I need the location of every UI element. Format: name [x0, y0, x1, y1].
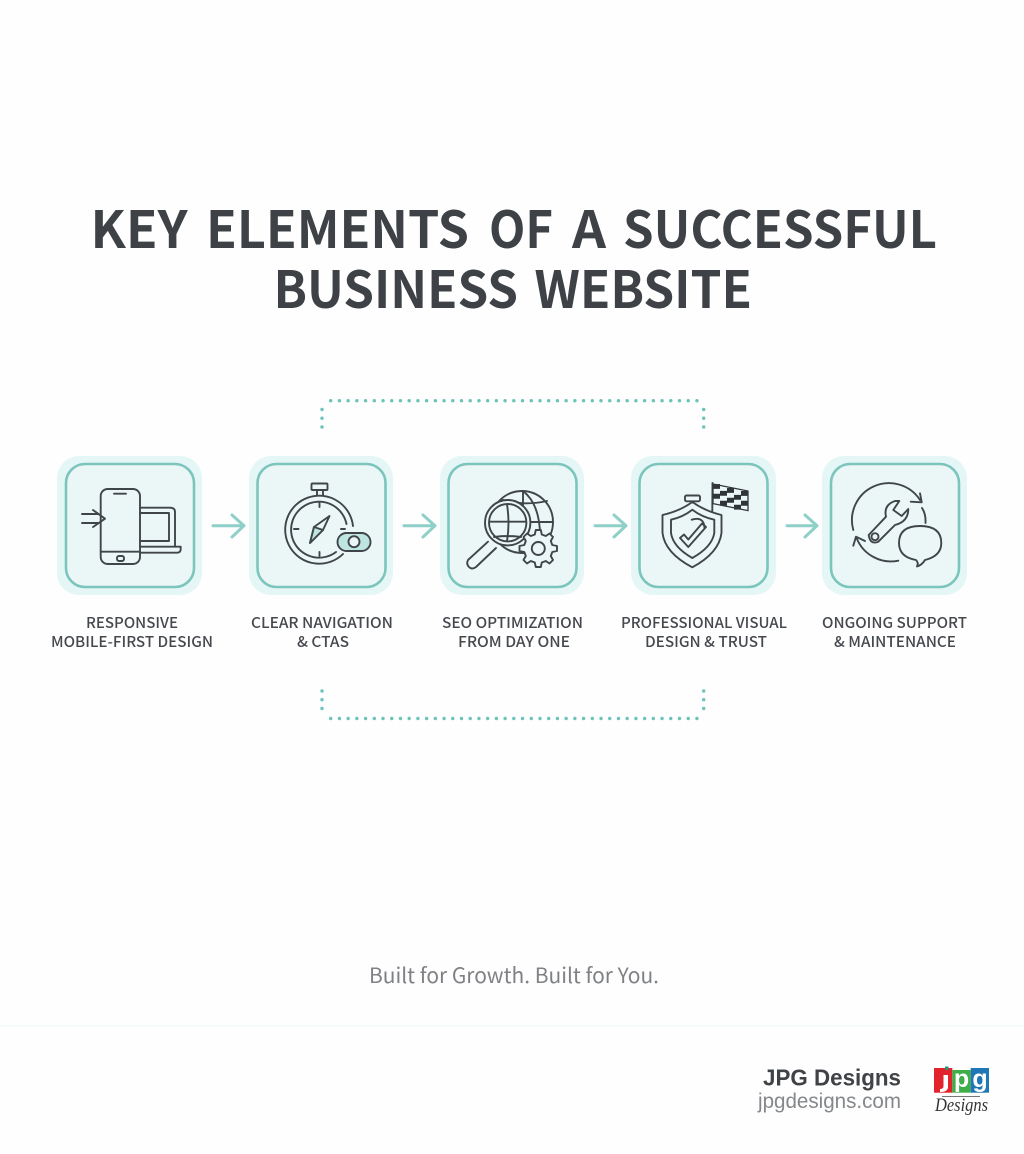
card 4	[631, 456, 776, 595]
footer brand text	[757, 1064, 901, 1113]
title: SUCCESSFUL	[623, 189, 937, 263]
footer brand text: JPG Designs	[763, 1064, 901, 1090]
card 2	[249, 456, 393, 595]
title: KEY	[90, 189, 188, 263]
footer brand text: jpgdesigns.com	[757, 1090, 901, 1113]
tagline: Built for Growth. Built for You.	[369, 960, 659, 990]
icon: shield with check and flag pole	[662, 483, 722, 567]
icon: magnifier, globe and gear	[467, 491, 557, 568]
title: WEBSITE	[534, 249, 752, 323]
panel: ongoing support and maintenance	[822, 456, 967, 652]
bottom dotted bracket	[322, 691, 704, 718]
label 1: MOBILE-FIRST DESIGN	[51, 631, 213, 652]
label 3: FROM DAY ONE	[458, 631, 570, 652]
label 4: PROFESSIONAL VISUAL	[621, 612, 787, 633]
label 1	[51, 612, 213, 652]
footer divider	[0, 1025, 1024, 1026]
panel: professional visual design and trust	[621, 456, 787, 652]
label 1: RESPONSIVE	[86, 612, 178, 633]
panel: clear navigation and CTAs	[249, 456, 393, 652]
icon: wrench, cycle arrows and speech bubble	[852, 483, 941, 566]
logo: JPG Designs: p	[954, 1065, 969, 1093]
icon: stopwatch compass with toggle	[285, 484, 370, 564]
panel: SEO optimization from day one	[440, 456, 584, 652]
label 5: & MAINTENANCE	[834, 631, 956, 652]
title: BUSINESS	[274, 249, 518, 323]
title: OF	[489, 189, 553, 263]
title	[90, 189, 937, 323]
arrow 1	[213, 515, 244, 537]
label 2	[251, 612, 393, 652]
arrow 3	[595, 515, 626, 537]
logo: JPG Designs	[934, 1065, 989, 1116]
title: ELEMENTS	[206, 189, 469, 263]
card 3	[440, 456, 584, 595]
label 3	[442, 612, 583, 652]
icon: phone and laptop	[82, 489, 181, 564]
title: A	[571, 189, 606, 263]
card 5	[822, 456, 967, 595]
label 5	[822, 612, 967, 652]
arrow 2	[404, 515, 435, 537]
top dotted bracket	[322, 401, 704, 428]
arrow 4	[787, 515, 817, 537]
card 1	[57, 456, 202, 595]
panel: responsive mobile-first design	[51, 456, 213, 652]
logo: JPG Designs: Designs	[934, 1095, 988, 1116]
logo: JPG Designs: g	[972, 1065, 988, 1093]
label 5: ONGOING SUPPORT	[822, 612, 967, 633]
label 3: SEO OPTIMIZATION	[442, 612, 583, 633]
label 4	[621, 612, 787, 652]
label 2: & CTAS	[297, 631, 349, 652]
label 2: CLEAR NAVIGATION	[251, 612, 393, 633]
icon: checkered flag	[713, 484, 748, 511]
label 4: DESIGN & TRUST	[645, 631, 767, 652]
